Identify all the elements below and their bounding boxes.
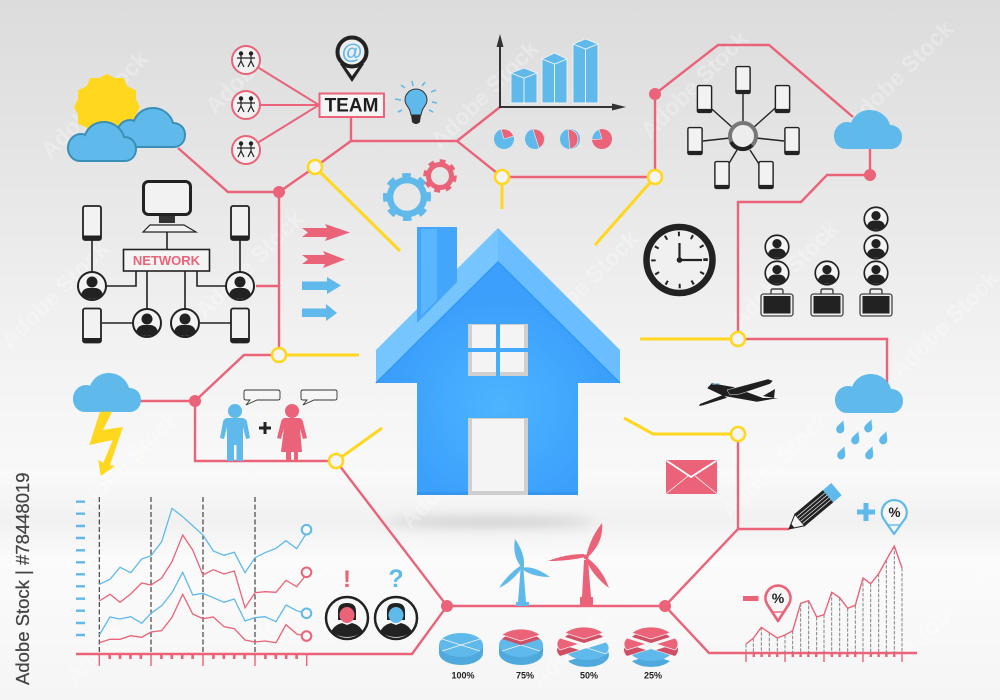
bar chart xyxy=(496,34,626,110)
plus sign xyxy=(259,422,271,434)
plus sign xyxy=(857,503,875,521)
pie 75 percent: 75% xyxy=(516,670,534,680)
team label box: TEAM xyxy=(325,96,378,116)
pie 75 percent xyxy=(499,629,543,680)
raindrops xyxy=(835,418,890,460)
direction arrows xyxy=(302,224,350,321)
icon: team people circles xyxy=(232,46,260,164)
icon: pencil xyxy=(784,483,842,535)
staff column 3 xyxy=(860,207,892,316)
team diagram xyxy=(232,38,384,164)
icon: blue wind turbine xyxy=(499,539,550,606)
network label box xyxy=(124,250,210,271)
icon: minus percent pin: % xyxy=(772,590,785,606)
pie 25 percent xyxy=(624,627,678,680)
icon: support agent question xyxy=(375,565,417,639)
watermarks: Adobe Stock xyxy=(635,25,753,143)
icon: man xyxy=(220,404,250,461)
pink connector network xyxy=(76,45,917,654)
pie 100 percent xyxy=(439,633,483,680)
chart line xyxy=(746,546,902,644)
stock credit text: Adobe Stock | #78448019 xyxy=(12,472,33,685)
watermarks: Adobe Stock xyxy=(425,35,543,153)
pie 50 percent xyxy=(557,627,609,680)
icon: rain cloud xyxy=(835,374,903,460)
hub ring xyxy=(730,123,756,149)
house window xyxy=(468,324,528,376)
watermarks: Adobe Stock xyxy=(190,205,308,323)
icon: email pin: @ xyxy=(342,41,362,64)
icon: support agent question: ? xyxy=(388,565,404,593)
network label box: NETWORK xyxy=(133,253,201,268)
icon: support agent alert: ! xyxy=(343,566,351,593)
staff column 2 xyxy=(811,261,843,316)
staff bars with briefcases xyxy=(761,207,892,316)
y axis ticks xyxy=(76,502,85,635)
house door xyxy=(468,418,528,495)
series lines xyxy=(99,508,306,643)
minus sign xyxy=(743,596,758,601)
icon: sun behind clouds xyxy=(68,74,185,161)
staff column 1 xyxy=(761,235,793,316)
network diagram xyxy=(78,182,254,342)
watermarks: Adobe Stock xyxy=(525,225,643,343)
icon: network users xyxy=(78,272,254,337)
icon: phone hub xyxy=(688,67,799,188)
percentage increase marker xyxy=(857,500,907,534)
icon: phones xyxy=(83,206,249,342)
series end markers xyxy=(302,525,311,641)
icon: pink gear xyxy=(425,161,455,191)
team connector lines xyxy=(246,60,319,150)
watermarks: Adobe Stock xyxy=(35,45,153,163)
icon: desktop computer xyxy=(143,182,196,232)
watermarks: Adobe Stock xyxy=(715,405,833,523)
house xyxy=(376,227,620,495)
watermarks: Adobe Stock xyxy=(235,545,353,663)
watermarks: Adobe xyxy=(200,50,269,119)
watermarks: Adobe Stock xyxy=(885,265,1000,383)
yellow junction rings xyxy=(272,160,745,468)
watermarks: Adobe Stock xyxy=(395,415,513,533)
house chimney xyxy=(417,227,457,323)
pink junction dots xyxy=(189,88,876,612)
dashed gridlines xyxy=(99,497,255,657)
area line chart xyxy=(746,546,902,662)
icon: woman xyxy=(277,404,307,461)
small pie charts xyxy=(494,129,612,149)
house roof xyxy=(376,228,620,383)
house body xyxy=(376,262,620,495)
line chart xyxy=(76,497,311,666)
icon: clock xyxy=(646,227,712,293)
yellow spokes to house xyxy=(279,167,738,461)
icon: top right cloud xyxy=(834,110,902,149)
watermarks: Adobe Stock xyxy=(725,215,843,333)
chart axis ticks xyxy=(746,653,902,662)
percentage decrease marker xyxy=(743,586,790,621)
icon: email pin xyxy=(338,38,366,82)
hub phones xyxy=(688,67,799,188)
icon: plus percent pin: % xyxy=(888,505,901,520)
network wiring xyxy=(92,232,240,323)
watermarks: Adobe Stock xyxy=(65,405,183,523)
3d pie charts xyxy=(439,627,678,680)
bar chart columns xyxy=(511,39,598,103)
x axis ticks xyxy=(99,654,307,666)
pie 50 percent: 50% xyxy=(580,670,598,680)
icon: storm cloud with lightning xyxy=(73,373,141,476)
watermarks: Adobe xyxy=(60,620,129,689)
watermarks: Adobe Stock xyxy=(525,575,643,693)
couple with speech bubbles xyxy=(220,390,337,461)
watermarks: Adobe Stock xyxy=(840,15,958,133)
hub spokes xyxy=(703,94,784,175)
pie 25 percent: 25% xyxy=(644,670,662,680)
icon: blue gear xyxy=(386,176,428,218)
icon: envelope xyxy=(666,460,717,494)
icon: support agent alert xyxy=(326,566,368,639)
icon: pink wind turbine xyxy=(548,523,609,606)
pie 100 percent: 100% xyxy=(451,670,475,680)
bar chart axes xyxy=(496,34,626,110)
speech bubbles xyxy=(244,390,337,405)
icon: plane xyxy=(699,379,778,406)
chart drop lines xyxy=(746,546,902,653)
icon: light bulb xyxy=(395,81,437,124)
